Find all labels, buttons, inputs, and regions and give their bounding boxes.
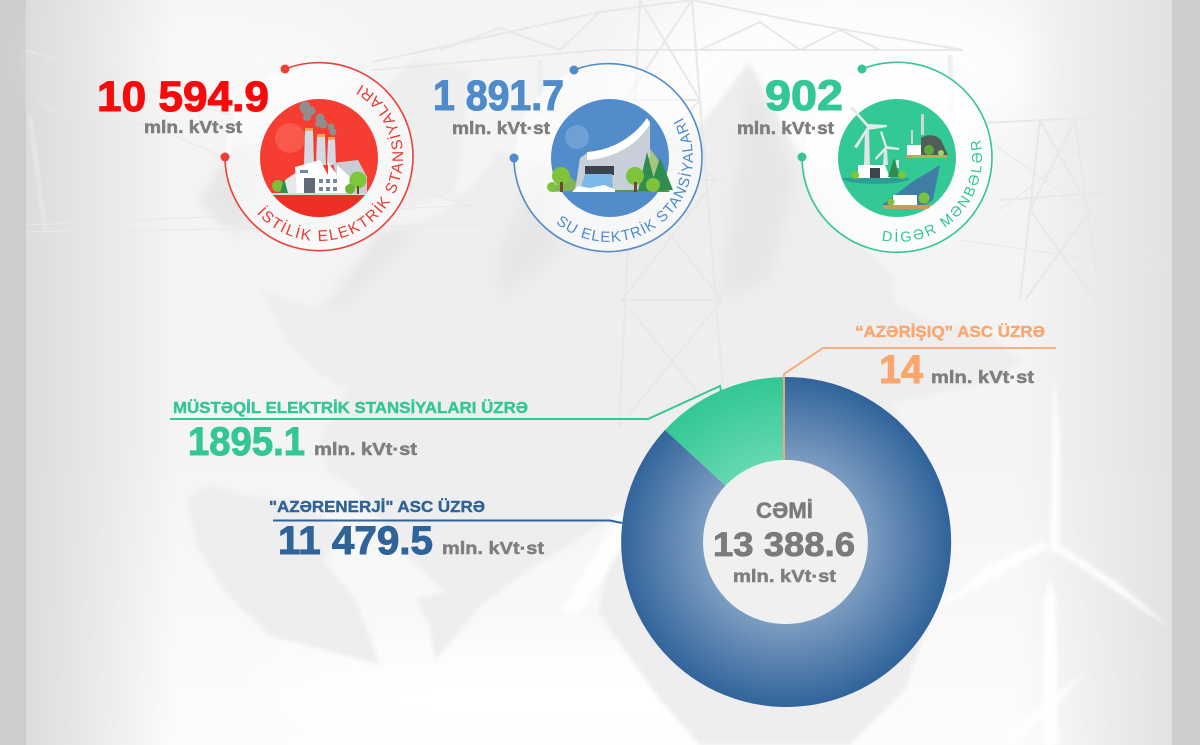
unit: independent stations: mln. kVt·st bbox=[314, 439, 417, 459]
ring: other sources bbox=[798, 62, 992, 252]
heading: Azərişıq: “AZƏRİŞIQ” ASC ÜZRƏ bbox=[855, 322, 1045, 341]
icon: thermal power plant bbox=[260, 99, 378, 217]
panel: thermal power stations bbox=[97, 62, 414, 252]
callout: independent stations bbox=[170, 386, 721, 464]
total value: 13 388.6 bbox=[713, 526, 855, 564]
map: landmass silhouette bbox=[186, 60, 1021, 745]
value: thermal: 10 594.9 bbox=[97, 73, 269, 121]
value: Azərişıq: 14 bbox=[879, 348, 924, 392]
value: independent stations: 1895.1 bbox=[188, 420, 305, 464]
icon: hydro power dam bbox=[547, 99, 673, 217]
value: other sources: 902 bbox=[765, 72, 843, 120]
value: Azərenerji: 11 479.5 bbox=[278, 519, 433, 563]
panel: hydro power stations bbox=[433, 62, 703, 252]
ring: thermal bbox=[220, 63, 413, 251]
unit: hydro: mln. kVt·st bbox=[452, 118, 550, 138]
callout: Azərenerji bbox=[269, 497, 622, 563]
total unit: mln. kVt·st bbox=[733, 566, 836, 586]
leader line: Azərenerji bbox=[273, 520, 622, 523]
icon: renewable energy sources bbox=[838, 99, 956, 217]
centre hole bbox=[703, 460, 867, 624]
label: thermal arc text: İSTİLİK ELEKTRİK STANSİYALARI bbox=[258, 84, 404, 242]
label: hydro arc text: SU ELEKTRİK STANSİYALARI bbox=[557, 118, 693, 242]
slice: Azərenerji bbox=[621, 377, 951, 707]
unit: other sources: mln. kVt·st bbox=[737, 118, 834, 138]
leader line: independent stations bbox=[170, 386, 721, 419]
value: hydro: 1 891.7 bbox=[433, 72, 564, 120]
donut chart bbox=[621, 377, 951, 707]
callout: Azərişıq bbox=[784, 322, 1056, 460]
heading: independent stations: MÜSTƏQİL ELEKTRİK STANSİYALARI ÜZRƏ bbox=[173, 398, 528, 417]
slice: independent stations bbox=[665, 377, 785, 486]
total label: CƏMİ bbox=[756, 498, 813, 523]
panel: other sources bbox=[737, 62, 993, 254]
unit: Azərenerji: mln. kVt·st bbox=[442, 538, 544, 558]
pylons: transmission towers bbox=[26, 0, 1172, 427]
ring: hydro bbox=[510, 64, 703, 252]
unit: thermal: mln. kVt·st bbox=[144, 117, 242, 137]
wind turbines bbox=[561, 372, 1172, 745]
unit: Azərişıq: mln. kVt·st bbox=[931, 367, 1034, 387]
leader line: Azərişıq bbox=[784, 348, 1056, 460]
label: other sources arc text: DİGƏR MƏNBƏLƏR bbox=[882, 140, 982, 242]
heading: Azərenerji: "AZƏRENERJİ" ASC ÜZRƏ bbox=[269, 497, 485, 516]
